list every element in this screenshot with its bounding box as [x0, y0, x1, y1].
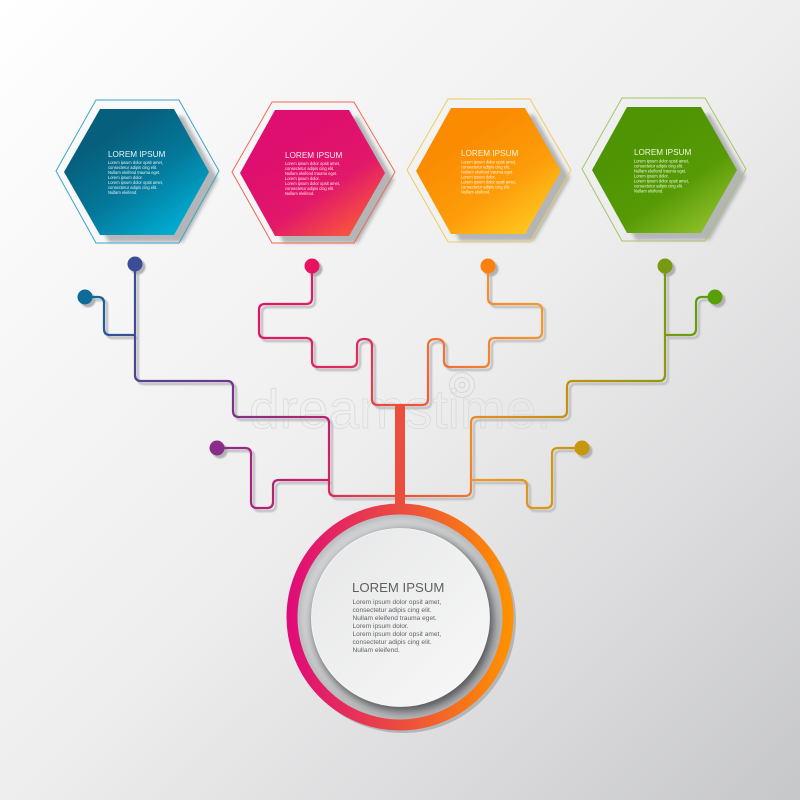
panel: hexagon 4 [582, 98, 746, 241]
text block: hexagon 2: consectetur adipis cing elit. [285, 166, 334, 171]
text block: hexagon 1: consectetur adipis cing elit. [108, 185, 157, 190]
text block: hexagon 3 [461, 160, 516, 194]
connector: purple branch [210, 440, 329, 508]
text block: hexagon 1: Nullam eleifend trauma eget. [108, 170, 160, 175]
panel: hexagon 1 [56, 100, 219, 243]
watermark: dreamstime. [249, 378, 552, 440]
heading: hexagon 3: LOREM IPSUM [461, 149, 519, 158]
text block: hexagon 3: consectetur adipis cing elit. [461, 164, 510, 170]
text block: hexagon 3: Lorem ipsum dolor. [461, 174, 496, 180]
connector: gold branch [471, 440, 590, 508]
text block: central circle [352, 599, 441, 654]
text block: central circle: consectetur adipis cing elit. [352, 607, 432, 614]
text block: hexagon 2: Lorem ipsum dolor. [285, 176, 320, 181]
text block: central circle: Nullam eleifend. [352, 647, 400, 654]
text block: hexagon 2: Nullam eleifend. [285, 191, 314, 196]
panel: hexagon 3 [407, 99, 571, 242]
text block: hexagon 3: Lorem ipsum dolor opsit amet, [461, 160, 516, 164]
text block: hexagon 4: consectetur adipis cing elit. [634, 184, 683, 188]
text block: hexagon 3: Lorem ipsum dolor opsit amet, [461, 180, 516, 184]
text block: hexagon 1 [108, 160, 163, 195]
text block: hexagon 2: consectetur adipis cing elit. [285, 186, 334, 191]
text block: hexagon 4: Lorem ipsum dolor opsit amet, [634, 158, 689, 164]
text block: hexagon 4: Lorem ipsum dolor. [634, 174, 669, 178]
text block: hexagon 1: Lorem ipsum dolor opsit amet, [108, 160, 163, 165]
text block: central circle: Nullam eleifend trauma eget. [352, 615, 437, 622]
text block: hexagon 4: Lorem ipsum dolor opsit amet, [634, 178, 689, 184]
heading: hexagon 1: LOREM IPSUM [108, 150, 166, 159]
panel: central circle [290, 507, 516, 733]
text block: hexagon 2: Lorem ipsum dolor opsit amet, [285, 181, 340, 186]
text block: hexagon 3: Nullam eleifend trauma eget. [461, 170, 513, 174]
text block: hexagon 4 [634, 158, 689, 194]
text block: central circle: Lorem ipsum dolor. [352, 623, 409, 630]
text block: hexagon 1: Lorem ipsum dolor opsit amet, [108, 180, 163, 185]
connector: green branch [400, 258, 722, 496]
text block: hexagon 4: consectetur adipis cing elit. [634, 164, 683, 168]
text block: central circle: Lorem ipsum dolor opsit amet, [352, 599, 441, 606]
heading: central circle: LOREM IPSUM [352, 580, 444, 595]
heading: hexagon 2: LOREM IPSUM [285, 151, 343, 160]
connector shadows [80, 260, 726, 511]
connector: main stem [395, 405, 405, 507]
connector: orange branch [400, 258, 542, 405]
text block: hexagon 2: Nullam eleifend trauma eget. [285, 171, 337, 176]
text block: hexagon 3: consectetur adipis cing elit. [461, 184, 510, 190]
text block: central circle: Lorem ipsum dolor opsit amet, [352, 631, 441, 638]
connector: blue branch [78, 256, 400, 496]
text block: hexagon 4: Nullam eleifend trauma eget. [634, 168, 686, 174]
text block: hexagon 1: Nullam eleifend. [108, 190, 137, 195]
text block: hexagon 4: Nullam eleifend. [634, 188, 663, 194]
heading: hexagon 4: LOREM IPSUM [634, 148, 692, 157]
panel: hexagon 2 [232, 102, 395, 243]
text block: hexagon 1: consectetur adipis cing elit. [108, 165, 157, 170]
text block: hexagon 3: Nullam eleifend. [461, 190, 490, 194]
text block: hexagon 2: Lorem ipsum dolor opsit amet, [285, 161, 340, 166]
text block: central circle: consectetur adipis cing elit. [352, 639, 432, 646]
text block: hexagon 1: Lorem ipsum dolor. [108, 175, 143, 180]
connector: pink branch [259, 258, 400, 405]
text block: hexagon 2 [285, 161, 340, 196]
